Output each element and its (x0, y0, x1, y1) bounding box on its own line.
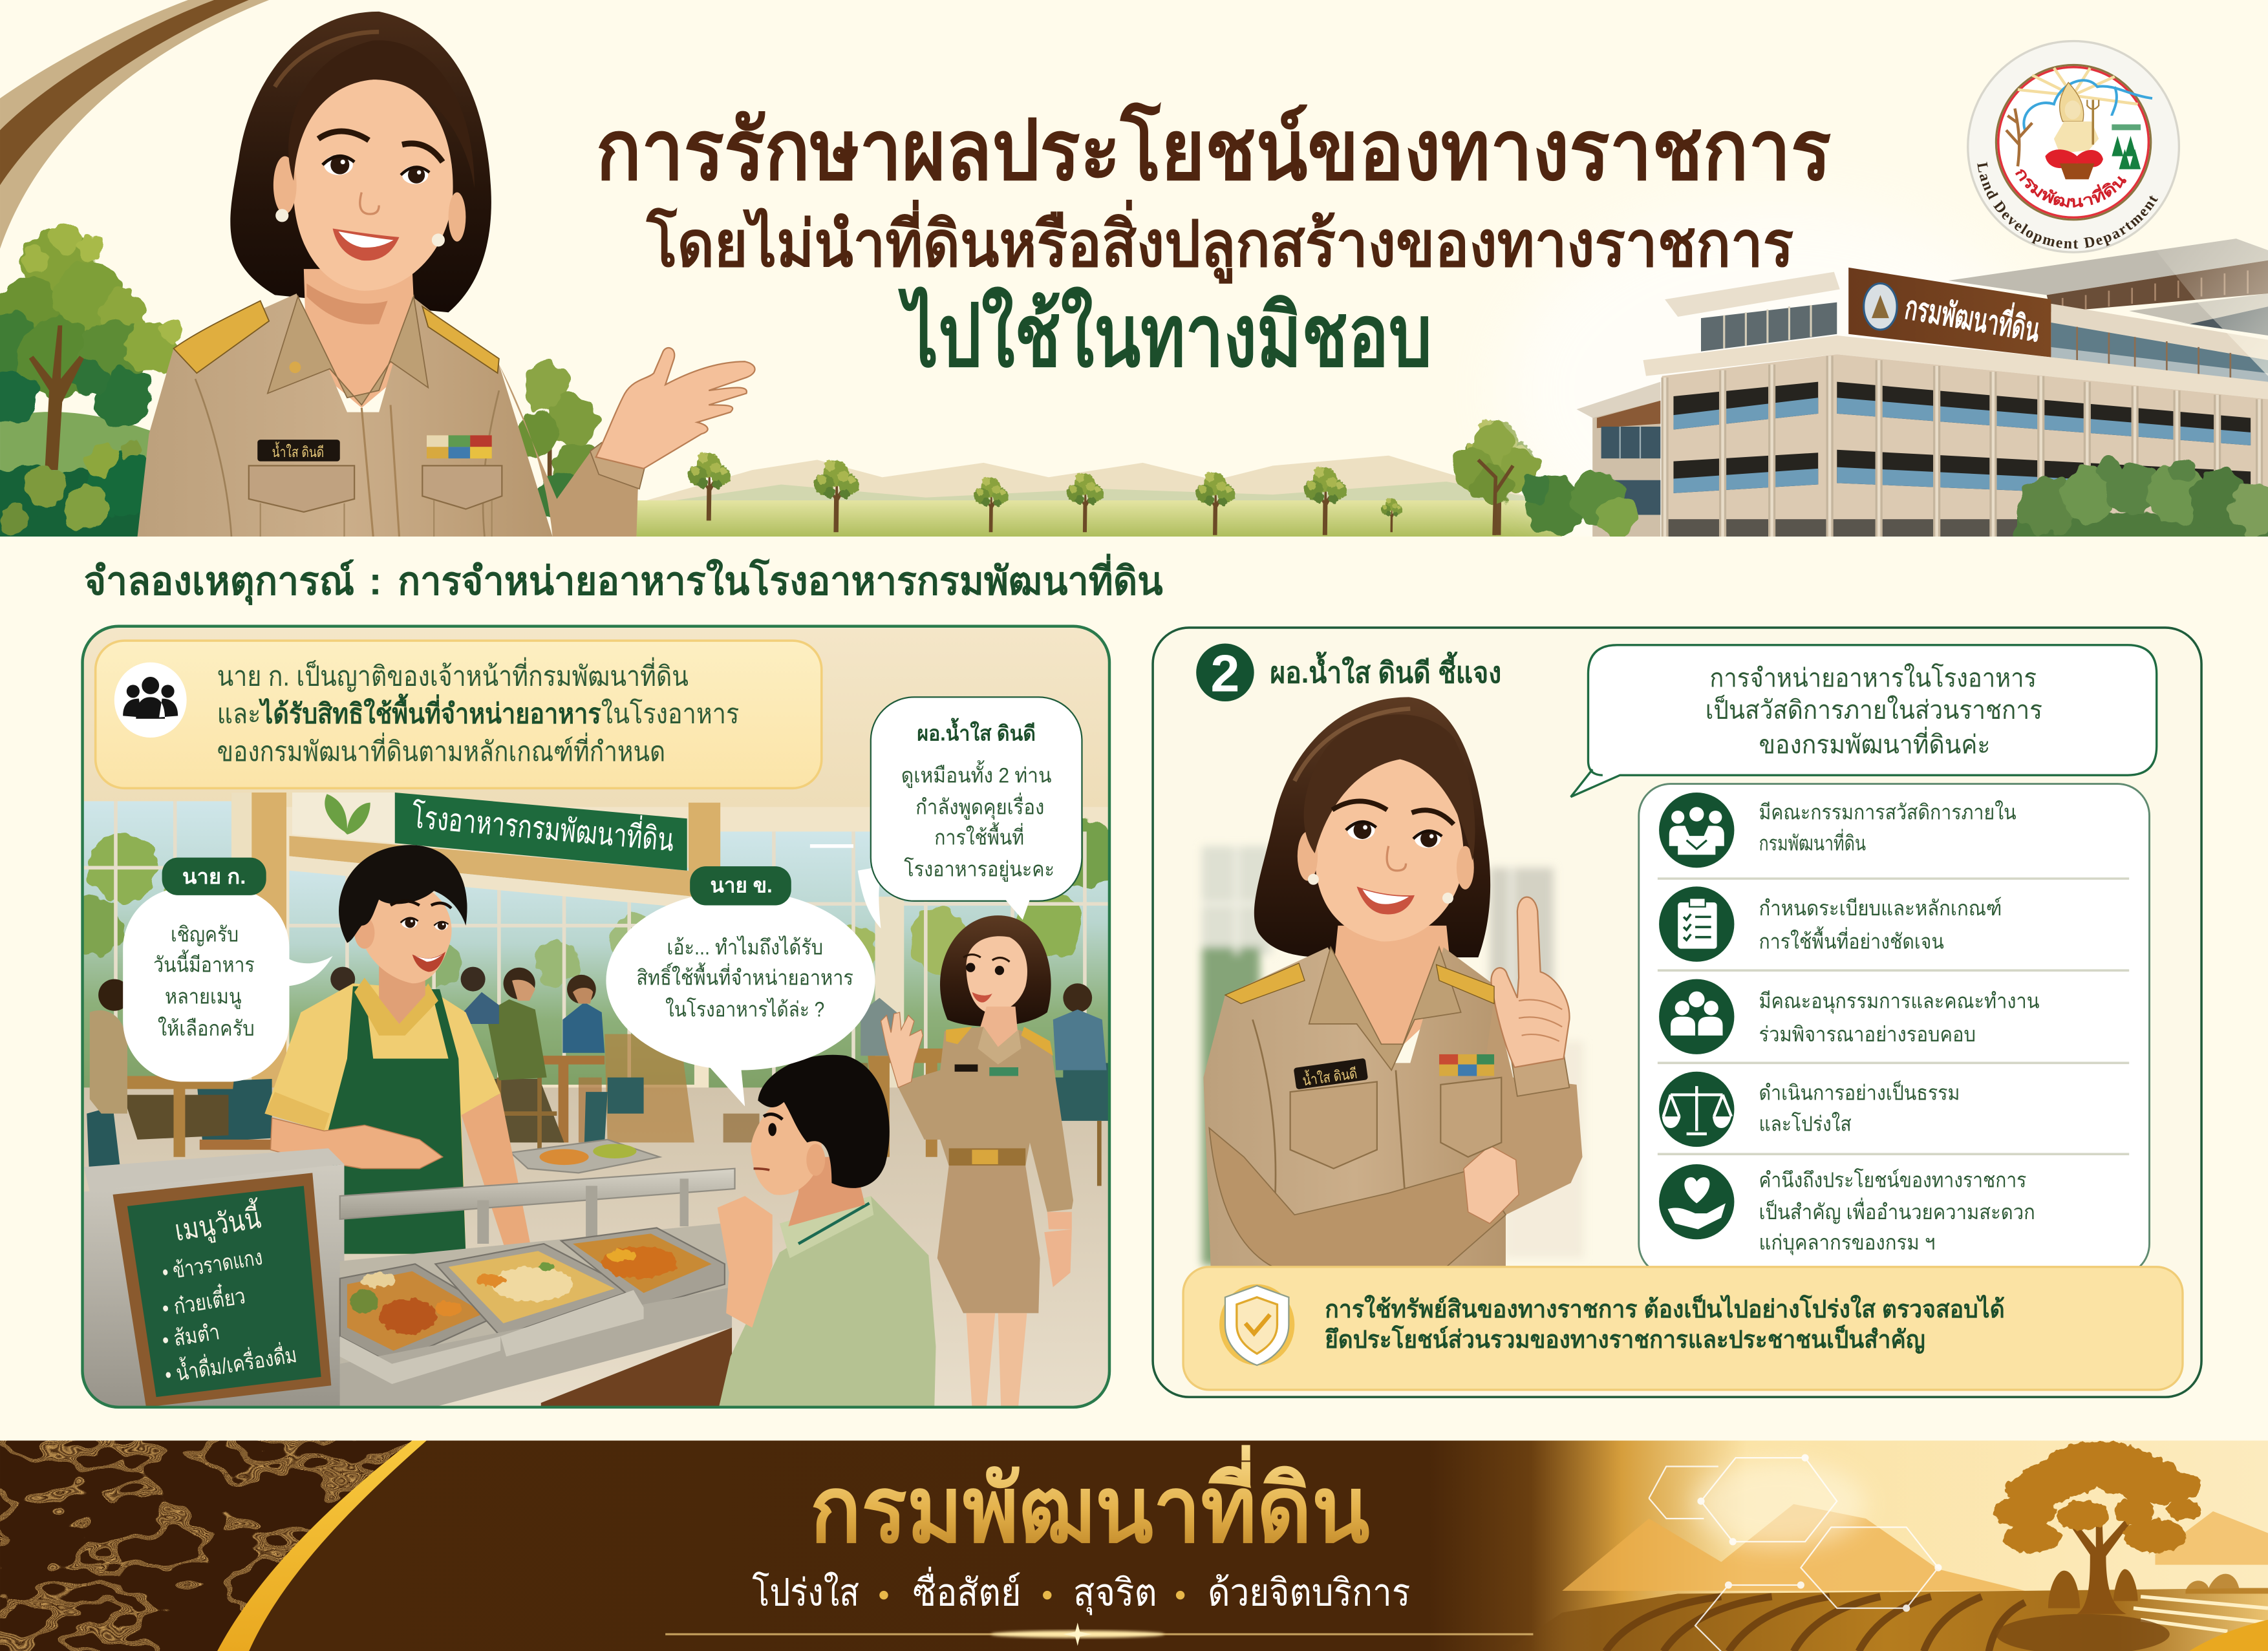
motto: โปร่งใส (752, 1571, 859, 1614)
nose (1387, 846, 1406, 871)
speech bubble: nai kor (123, 858, 333, 1081)
pockets (1290, 1081, 1377, 1169)
speech bubble: director: ผอ.น้ำใส ดินดี (917, 718, 1036, 745)
earrings (1308, 874, 1319, 885)
row 4: scales of justice (1659, 1072, 1960, 1147)
epaulettes (173, 301, 269, 373)
left counter and menu board: • ข้าวราดแกง (160, 1246, 264, 1285)
panel border (83, 626, 1109, 1407)
row 4: scales of justice: และโปร่งใส (1759, 1111, 1852, 1135)
front hair (288, 40, 475, 188)
button placket (361, 405, 399, 537)
canteen illustration: โรงอาหารกรมพัฒนาที่ดิน (410, 794, 676, 858)
wooden pillars (231, 793, 286, 1089)
section heading: การจำหน่ายอาหารในโรงอาหารกรมพัฒนาที่ดิน (398, 553, 1163, 602)
logo: land development department seal: Land Development Department (1977, 162, 2158, 249)
decorative swoosh top left (0, 0, 269, 249)
blurred background window (1202, 846, 1584, 1266)
director small figure (881, 915, 1073, 1407)
upper sleeve and elbow (1478, 998, 1583, 1215)
left ear (1298, 831, 1318, 880)
hair back (230, 12, 491, 312)
speech bubble: director: ดูเหมือนทั้ง 2 ท่าน (901, 760, 1051, 788)
speech bubble: nai kor: เชิญครับ (171, 922, 239, 946)
main facade (1662, 354, 2268, 537)
collar (1309, 947, 1461, 1070)
seated deity (2045, 83, 2103, 179)
row 3: subcommittee: มีคณะอนุกรรมการและคณะทำงาน (1759, 989, 2039, 1014)
left counter and menu board: • ก๋วยเตี๋ยว (160, 1279, 247, 1321)
row 4: scales of justice: ดำเนินการอย่างเป็นธรรม (1759, 1080, 1960, 1104)
ribbon bar (1439, 1054, 1494, 1076)
ceiling lights (318, 831, 998, 879)
diners (90, 967, 1106, 1114)
speech bubble: nai kor: ให้เลือกครับ (158, 1016, 255, 1040)
number badge (1196, 644, 1254, 703)
speech bubble: nai kor: หลายเมนู (165, 985, 242, 1010)
field and landscape (1504, 1461, 2268, 1651)
logo: land development department seal (1967, 40, 2180, 253)
gold arc (217, 1440, 427, 1651)
distant hills (1562, 1504, 2025, 1591)
green trees (2112, 124, 2141, 169)
neck (1331, 926, 1453, 1056)
upper tray on counter (511, 1140, 659, 1173)
department name: กรมพัฒนาที่ดิน (810, 1445, 1370, 1562)
thai name on seal (2015, 172, 2132, 207)
face (1315, 759, 1464, 941)
row 2: regulations: กำหนดระเบียบและหลักเกณฑ์ (1759, 897, 2002, 920)
speech bubble: nai khor: ในโรงอาหารได้ล่ะ ? (665, 997, 824, 1021)
rooftop block (1701, 303, 1837, 352)
icon: people group (114, 663, 187, 738)
title line 3: ไปใช้ในทางมิชอบ (898, 286, 1432, 385)
motto: สุจริต (1073, 1571, 1157, 1615)
name tag (257, 440, 340, 462)
row 1: committee (1659, 793, 2017, 868)
row 1: committee: กรมพัฒนาที่ดิน (1759, 828, 1866, 855)
speech bubble: explanation: ของกรมพัฒนาที่ดินค่ะ (1759, 727, 1990, 760)
back wing (1949, 239, 2268, 295)
label pill: nai khor (690, 866, 791, 905)
row 5: heart in hand: เป็นสำคัญ เพื่ออำนวยความสะดวก (1759, 1197, 2035, 1224)
left windows (83, 801, 231, 1091)
side wing (1592, 388, 1660, 537)
dry tree (2006, 109, 2032, 166)
director figure (1203, 697, 1583, 1267)
tables and chairs (87, 1034, 1109, 1186)
pockets (249, 465, 354, 512)
soft fade at the upper right (2141, 231, 2268, 376)
section heading: : (369, 559, 382, 602)
hair back (1254, 697, 1490, 957)
presenter woman in khaki uniform (138, 12, 755, 537)
section heading (84, 553, 1163, 605)
label pill: nai kor: นาย ก. (182, 865, 246, 888)
speech bubble: explanation: การจำหน่ายอาหารในโรงอาหาร (1709, 663, 2037, 693)
landscape background (636, 456, 1577, 537)
epaulettes (1225, 963, 1305, 1004)
right ear (449, 193, 465, 242)
sleeve and forearm (499, 365, 642, 537)
list card: welfare principles (1639, 784, 2150, 1275)
row 2: regulations (1659, 886, 2002, 962)
left counter and menu board: • น้ำดื่ม/เครื่องดื่ม (163, 1339, 299, 1388)
torso shirt (138, 293, 553, 537)
trees and bushes in front of building (1451, 424, 2268, 542)
folded arm (1209, 1128, 1506, 1267)
vendor man (264, 845, 531, 1254)
number badge: 2 (1211, 644, 1239, 703)
tree silhouette (1993, 1442, 2268, 1614)
sun rays (2018, 68, 2138, 104)
label pill: nai khor: นาย ข. (710, 873, 773, 897)
name tag: น้ำใส ดินดี (272, 442, 324, 460)
panel: canteen scenario (65, 626, 1120, 1409)
speech bubble: nai khor: สิทธิ์ใช้พื้นที่จำหน่ายอาหาร (636, 963, 853, 990)
main slab (1643, 336, 2268, 399)
hexagon network (1649, 1455, 1941, 1651)
title line 2: โดยไม่นำที่ดินหรือสิ่งปลูกสร้างของทางราชการ (646, 200, 1793, 284)
speech bubble: director: กำลังพูดคุยเรื่อง (915, 793, 1044, 820)
scenario callout (96, 641, 822, 788)
clouds (2024, 80, 2152, 130)
right windows (709, 831, 1114, 1092)
upper storey right (2051, 304, 2268, 360)
earrings (275, 209, 288, 222)
eyebrows (318, 131, 369, 140)
neck (304, 269, 416, 408)
raised hand (1491, 897, 1570, 1067)
building: land development department: กรมพัฒนาที่ดิน (1902, 284, 2044, 349)
mid windows (289, 868, 694, 1085)
cuff (1512, 1053, 1569, 1096)
scenario callout: ของกรมพัฒนาที่ดินตามหลักเกณฑ์ที่กำหนด (217, 732, 665, 767)
beam and sign (289, 836, 723, 900)
face (294, 80, 453, 291)
eyes (323, 154, 354, 175)
wood contour pattern (0, 1440, 420, 1651)
ribbon bar (427, 435, 492, 458)
front hair (1304, 714, 1475, 860)
food counter (340, 1169, 735, 1407)
building: land development department (1478, 218, 2268, 537)
logo: land development department seal: กรมพัฒนาที่ดิน (2015, 169, 2126, 208)
row 2: regulations: การใช้พื้นที่อย่างชัดเจน (1759, 926, 1944, 953)
speech bubble: nai khor (606, 866, 875, 1106)
motto: ซื่อสัตย์ (913, 1566, 1021, 1614)
tree right of the presenter (519, 359, 602, 517)
left counter and menu board: เมนูวันนี้ (171, 1197, 264, 1248)
left counter and menu board (84, 1148, 344, 1407)
name tag: น้ำใส ดินดี (1301, 1063, 1358, 1089)
speech bubble: director (858, 697, 1082, 928)
left counter and menu board: • ส้มตำ (160, 1320, 221, 1353)
section heading: จำลองเหตุการณ์ (84, 559, 354, 605)
nose (360, 193, 379, 214)
icon: shield (1219, 1284, 1294, 1365)
smile (333, 228, 399, 261)
speech bubble: nai khor: เอ้ะ... ทำไมถึงได้รับ (667, 935, 823, 959)
speech bubble: explanation (1571, 645, 2157, 797)
customer man (718, 1055, 936, 1407)
row 5: heart in hand: แก่บุคลากรของกรม ฯ (1759, 1231, 1935, 1255)
row 3: subcommittee: ร่วมพิจารณาอย่างรอบคอบ (1759, 1023, 1976, 1046)
label pill: nai kor (162, 858, 266, 895)
speech bubble: director: โรงอาหารอยู่นะคะ (904, 857, 1054, 882)
panel heading: ผอ.น้ำใส ดินดี ชี้แจง (1270, 651, 1501, 689)
collar (268, 297, 428, 405)
motto (752, 1566, 1410, 1615)
floor (83, 1087, 1109, 1409)
scenario callout: นาย ก. เป็นญาติของเจ้าหน้าที่กรมพัฒนาที่ดิน (217, 657, 689, 692)
smile (1357, 886, 1415, 914)
window bands (1662, 382, 2268, 537)
torso (1203, 947, 1506, 1267)
row 5: heart in hand (1659, 1164, 2035, 1255)
row 1: committee: มีคณะกรรมการสวัสดิการภายใน (1759, 800, 2017, 824)
callout: transparency: การใช้ทรัพย์สินของทางราชการ ต้องเป็นไปอย่างโปร่งใส ตรวจสอบได้ (1325, 1294, 2005, 1323)
panel: director explains (1153, 628, 2201, 1397)
canteen illustration (65, 626, 1120, 1409)
eyebrows (1332, 801, 1387, 810)
speech bubble: explanation: เป็นสวัสดิการภายในส่วนราชการ (1706, 694, 2042, 725)
open palm (596, 348, 755, 469)
speech bubble: director: การใช้พื้นที่ (934, 822, 1024, 849)
eyes (1346, 820, 1376, 840)
speech bubble: nai kor: วันนี้มีอาหาร (153, 949, 255, 976)
crop rows (1504, 1588, 2268, 1651)
trees left of the presenter (0, 223, 182, 542)
callout: transparency (1183, 1267, 2183, 1390)
glowing divider (665, 1623, 1533, 1646)
footer banner (0, 1440, 2268, 1651)
row 5: heart in hand: คำนึงถึงประโยชน์ของทางราชการ (1759, 1168, 2026, 1192)
row 3: subcommittee (1659, 979, 2039, 1054)
building sign (1848, 268, 2051, 357)
main title (596, 101, 1831, 385)
motto: ด้วยจิตบริการ (1208, 1571, 1410, 1614)
scenario callout: และได้รับสิทธิใช้พื้นที่จำหน่ายอาหารในโรงอาหาร (217, 694, 739, 730)
facade columns (1665, 356, 2260, 537)
english arc text (1977, 164, 2170, 248)
callout: transparency: ยึดประโยชน์ส่วนรวมของทางราชการและประชาชนเป็นสำคัญ (1325, 1325, 1925, 1354)
row of small landscape trees (688, 420, 1534, 535)
title line 1: การรักษาผลประโยชน์ของทางราชการ (596, 101, 1831, 197)
right ear (1457, 846, 1474, 889)
seal ring (1998, 67, 2148, 217)
header illustration band (0, 0, 2268, 579)
left ear (273, 156, 297, 214)
